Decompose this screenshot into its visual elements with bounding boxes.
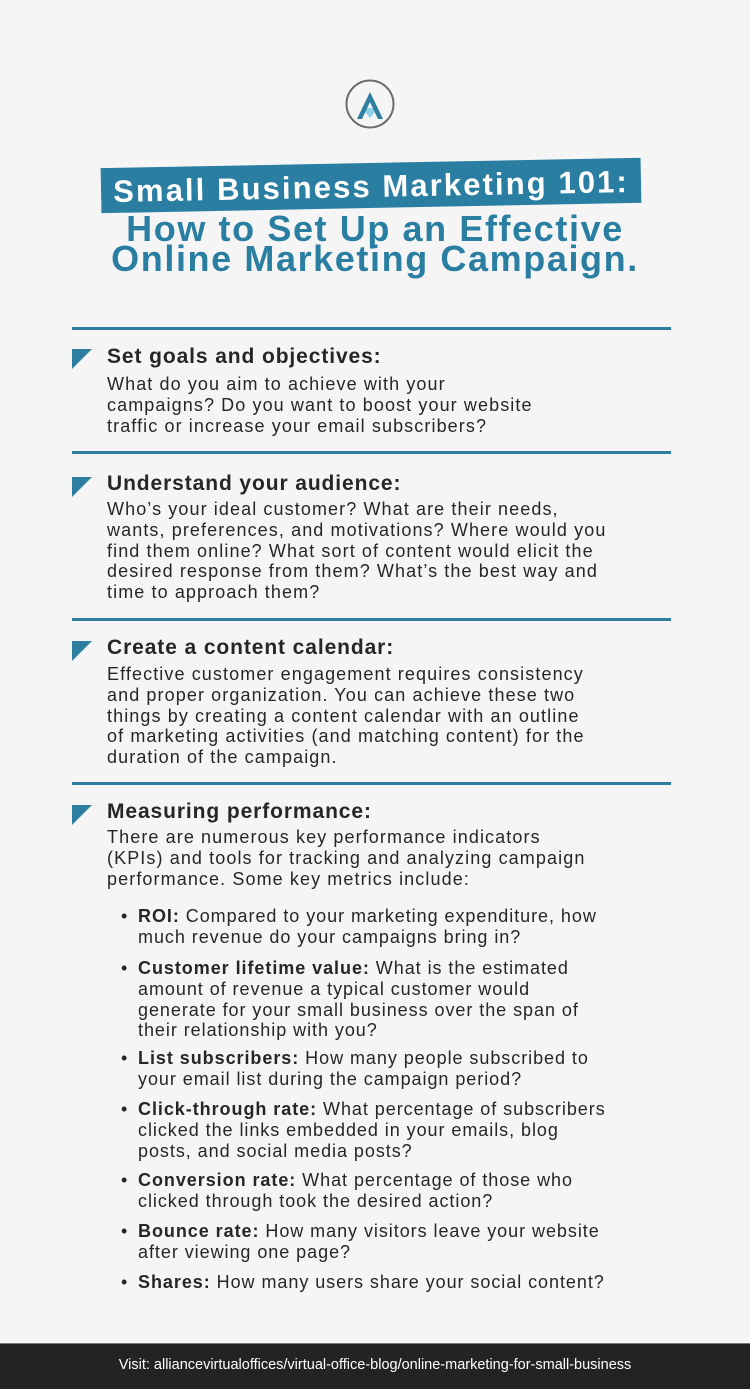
bullet list: clicked through took the desired action? [138,1191,493,1211]
bullet list: • [121,1272,128,1292]
section: measuring performance: Measuring performance: [107,800,372,823]
section: content calendar: and proper organization. You can achieve these two [107,685,575,705]
bullet list [121,906,606,1292]
bullet list: posts, and social media posts? [138,1141,413,1161]
bullet list: Shares: How many users share your social content? [138,1272,605,1292]
bullet list: generate for your small business over the span of [138,1000,579,1020]
bullet list: • [121,1048,128,1068]
subtitle [111,208,639,279]
bullet list: amount of revenue a typical customer would [138,979,530,999]
logo [346,80,394,128]
section: measuring performance: There are numerous key performance indicators [107,827,541,847]
bullet list: ROI: Compared to your marketing expenditure, how [138,906,597,926]
bullet list: • [121,1170,128,1190]
section: audience: time to approach them? [107,582,320,602]
section: goals: What do you aim to achieve with your [107,374,446,394]
section: content calendar: duration of the campaign. [107,747,338,767]
bullet list: Click-through rate: What percentage of subscribers [138,1099,606,1119]
section: content calendar [72,636,585,767]
section: measuring performance [72,800,606,1292]
section: goals: Set goals and objectives: [107,345,382,368]
bullet list: • [121,1099,128,1119]
bullet list: List subscribers: How many people subscribed to [138,1048,589,1068]
bullet list: clicked the links embedded in your emails, blog [138,1120,559,1140]
section: goals: traffic or increase your email subscribers? [107,416,487,436]
bullet list: • [121,958,128,978]
bullet list: Bounce rate: How many visitors leave your website [138,1221,600,1241]
section: goals: campaigns? Do you want to boost your website [107,395,533,415]
subtitle: How to Set Up an Effective [126,208,624,249]
section: audience: Who’s your ideal customer? What are their needs, [107,499,559,519]
section: audience: wants, preferences, and motivations? Where would you [107,520,606,540]
subtitle: Online Marketing Campaign. [111,238,639,279]
bullet list: • [121,1221,128,1241]
bullet list: your email list during the campaign period? [138,1069,522,1089]
bullet list: • [121,906,128,926]
bullet list: Customer lifetime value: What is the estimated [138,958,569,978]
bullet list: their relationship with you? [138,1020,378,1040]
section: measuring performance: (KPIs) and tools for tracking and analyzing campaign [107,848,585,868]
title banner: Small Business Marketing 101: [113,164,629,209]
section: content calendar: of marketing activities (and matching content) for the [107,726,585,746]
section: content calendar: Create a content calendar: [107,636,394,659]
section: audience: desired response from them? What’s the best way and [107,561,598,581]
section: content calendar: things by creating a content calendar with an outline [107,706,580,726]
bullet list: much revenue do your campaigns bring in? [138,927,521,947]
section: goals [72,345,533,436]
section: audience: Understand your audience: [107,472,401,495]
bullet list: after viewing one page? [138,1242,351,1262]
footer: Visit: alliancevirtualoffices/virtual-office-blog/online-marketing-for-small-business [119,1357,631,1373]
footer [0,1343,750,1389]
section: content calendar: Effective customer engagement requires consistency [107,664,584,684]
section: audience [72,472,606,602]
bullet list: Conversion rate: What percentage of those who [138,1170,573,1190]
section: audience: find them online? What sort of content would elicit the [107,541,594,561]
section: measuring performance: performance. Some key metrics include: [107,869,470,889]
